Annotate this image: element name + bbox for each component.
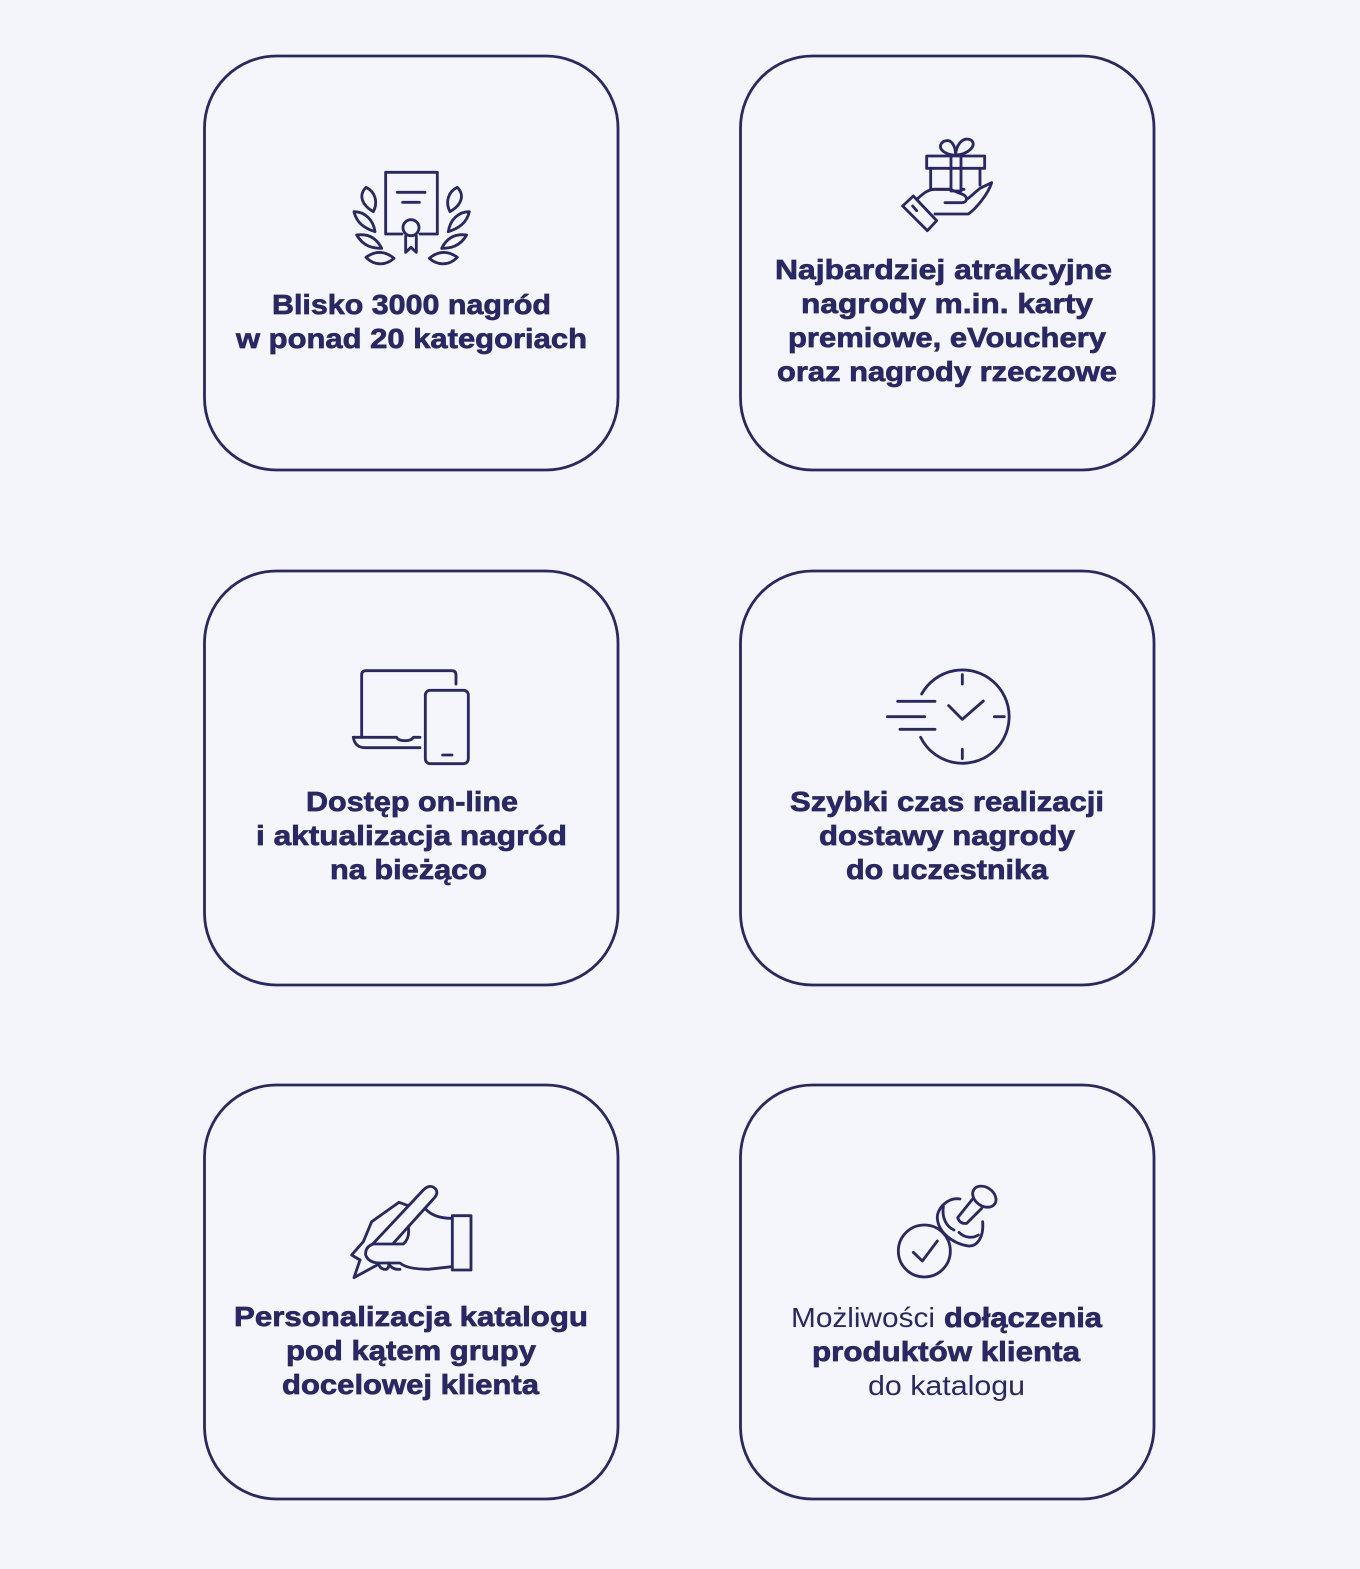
icon: fast clock xyxy=(887,670,1009,763)
icon: laptop and phone xyxy=(353,671,468,764)
panel: szybka realizacja xyxy=(740,571,1154,985)
text: atrakcyjne nagrody: oraz nagrody rzeczowe xyxy=(777,356,1117,387)
text: nagrody xyxy=(235,289,587,354)
text: personalizacja: pod kątem grupy xyxy=(286,1335,536,1366)
text: produkty klienta: dołączenia xyxy=(944,1302,1102,1333)
icon: gift on hand xyxy=(903,139,992,231)
text: personalizacja: Personalizacja katalogu xyxy=(234,1301,588,1332)
text: dostep on-line: Dostęp on-line xyxy=(306,786,518,817)
icon: stamp with check xyxy=(898,1182,1000,1277)
text: nagrody: Blisko 3000 nagród xyxy=(272,289,551,320)
text: produkty klienta: produktów klienta xyxy=(812,1336,1080,1367)
icon: hand with pen xyxy=(352,1186,471,1278)
text: dostep on-line: i aktualizacja nagród xyxy=(256,820,567,851)
text: personalizacja xyxy=(234,1301,588,1400)
text: produkty klienta: Możliwości xyxy=(791,1302,935,1333)
text: atrakcyjne nagrody: Najbardziej atrakcyjne xyxy=(775,254,1112,285)
panel: produkty klienta xyxy=(740,1085,1154,1499)
panel: personalizacja xyxy=(204,1085,618,1499)
text: personalizacja: docelowej klienta xyxy=(282,1369,539,1400)
text: atrakcyjne nagrody xyxy=(775,254,1117,387)
text: dostep on-line xyxy=(256,786,567,885)
text: szybka realizacja: dostawy nagrody xyxy=(819,820,1075,851)
panel: atrakcyjne nagrody xyxy=(740,56,1154,470)
panel: dostep on-line xyxy=(204,571,618,985)
text: szybka realizacja: Szybki czas realizacji xyxy=(790,786,1104,817)
text: atrakcyjne nagrody: premiowe, eVouchery xyxy=(788,322,1106,353)
icon: certificate with laurel xyxy=(354,172,469,264)
panel: nagrody xyxy=(204,56,618,470)
text: atrakcyjne nagrody: nagrody m.in. karty xyxy=(801,288,1093,319)
text: produkty klienta: do katalogu xyxy=(868,1370,1025,1401)
text: szybka realizacja: do uczestnika xyxy=(846,854,1048,885)
text: dostep on-line: na bieżąco xyxy=(330,854,487,885)
text: nagrody: w ponad 20 kategoriach xyxy=(235,323,587,354)
text: szybka realizacja xyxy=(790,786,1104,885)
text: produkty klienta xyxy=(791,1302,1102,1401)
